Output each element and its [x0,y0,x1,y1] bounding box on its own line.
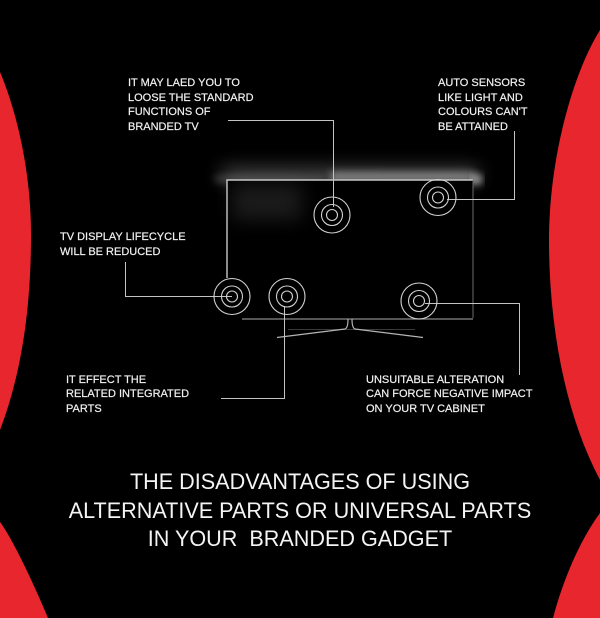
callout: cabinet impact: ON YOUR TV CABINET [366,403,485,415]
callout: integrated parts [66,374,189,415]
red shape: right lower curve [553,513,600,618]
callout: auto sensors [438,77,528,133]
target rings: top right [420,180,456,216]
callout: cabinet impact: UNSUITABLE ALTERATION [366,374,504,386]
callout: standard functions: FUNCTIONS OF [128,106,210,118]
TV outline [227,180,473,338]
callout: cabinet impact: CAN FORCE NEGATIVE IMPACT [366,388,532,400]
red shape: left lower curve [0,522,48,618]
callout: integrated parts: RELATED INTEGRATED [66,388,189,400]
target rings: top centre [314,197,350,233]
target rings: bottom right [401,283,437,319]
callout: display lifecycle: TV DISPLAY LIFECYCLE [60,230,186,242]
title: THE DISADVANTAGES OF USING ALTERNATIVE PARTS OR UNIVERSAL PARTS IN YOUR BRANDED GADGET [69,469,531,551]
callout: standard functions: IT MAY LAED YOU TO [128,77,240,89]
callout: auto sensors: LIKE LIGHT AND [438,92,523,104]
callout: standard functions: BRANDED TV [128,121,199,133]
TV stand [277,319,423,338]
callout: display lifecycle [60,230,186,258]
callout: standard functions [128,77,254,133]
callout: integrated parts: PARTS [66,403,102,415]
callout: auto sensors: BE ATTAINED [438,121,508,133]
red shape: right upper curve [549,30,600,480]
leader lines [126,120,520,398]
callout: auto sensors: AUTO SENSORS [438,77,525,89]
callout: auto sensors: COLOURS CAN'T [438,106,528,118]
callout: standard functions: LOOSE THE STANDARD [128,92,254,104]
red shape: left upper curve [0,72,31,430]
callout: integrated parts: IT EFFECT THE [66,374,146,386]
callout: display lifecycle: WILL BE REDUCED [60,246,160,258]
callout: cabinet impact [366,374,532,415]
target rings: bottom second [269,278,305,314]
TV glow [215,168,482,220]
target rings: bottom left [214,278,250,314]
